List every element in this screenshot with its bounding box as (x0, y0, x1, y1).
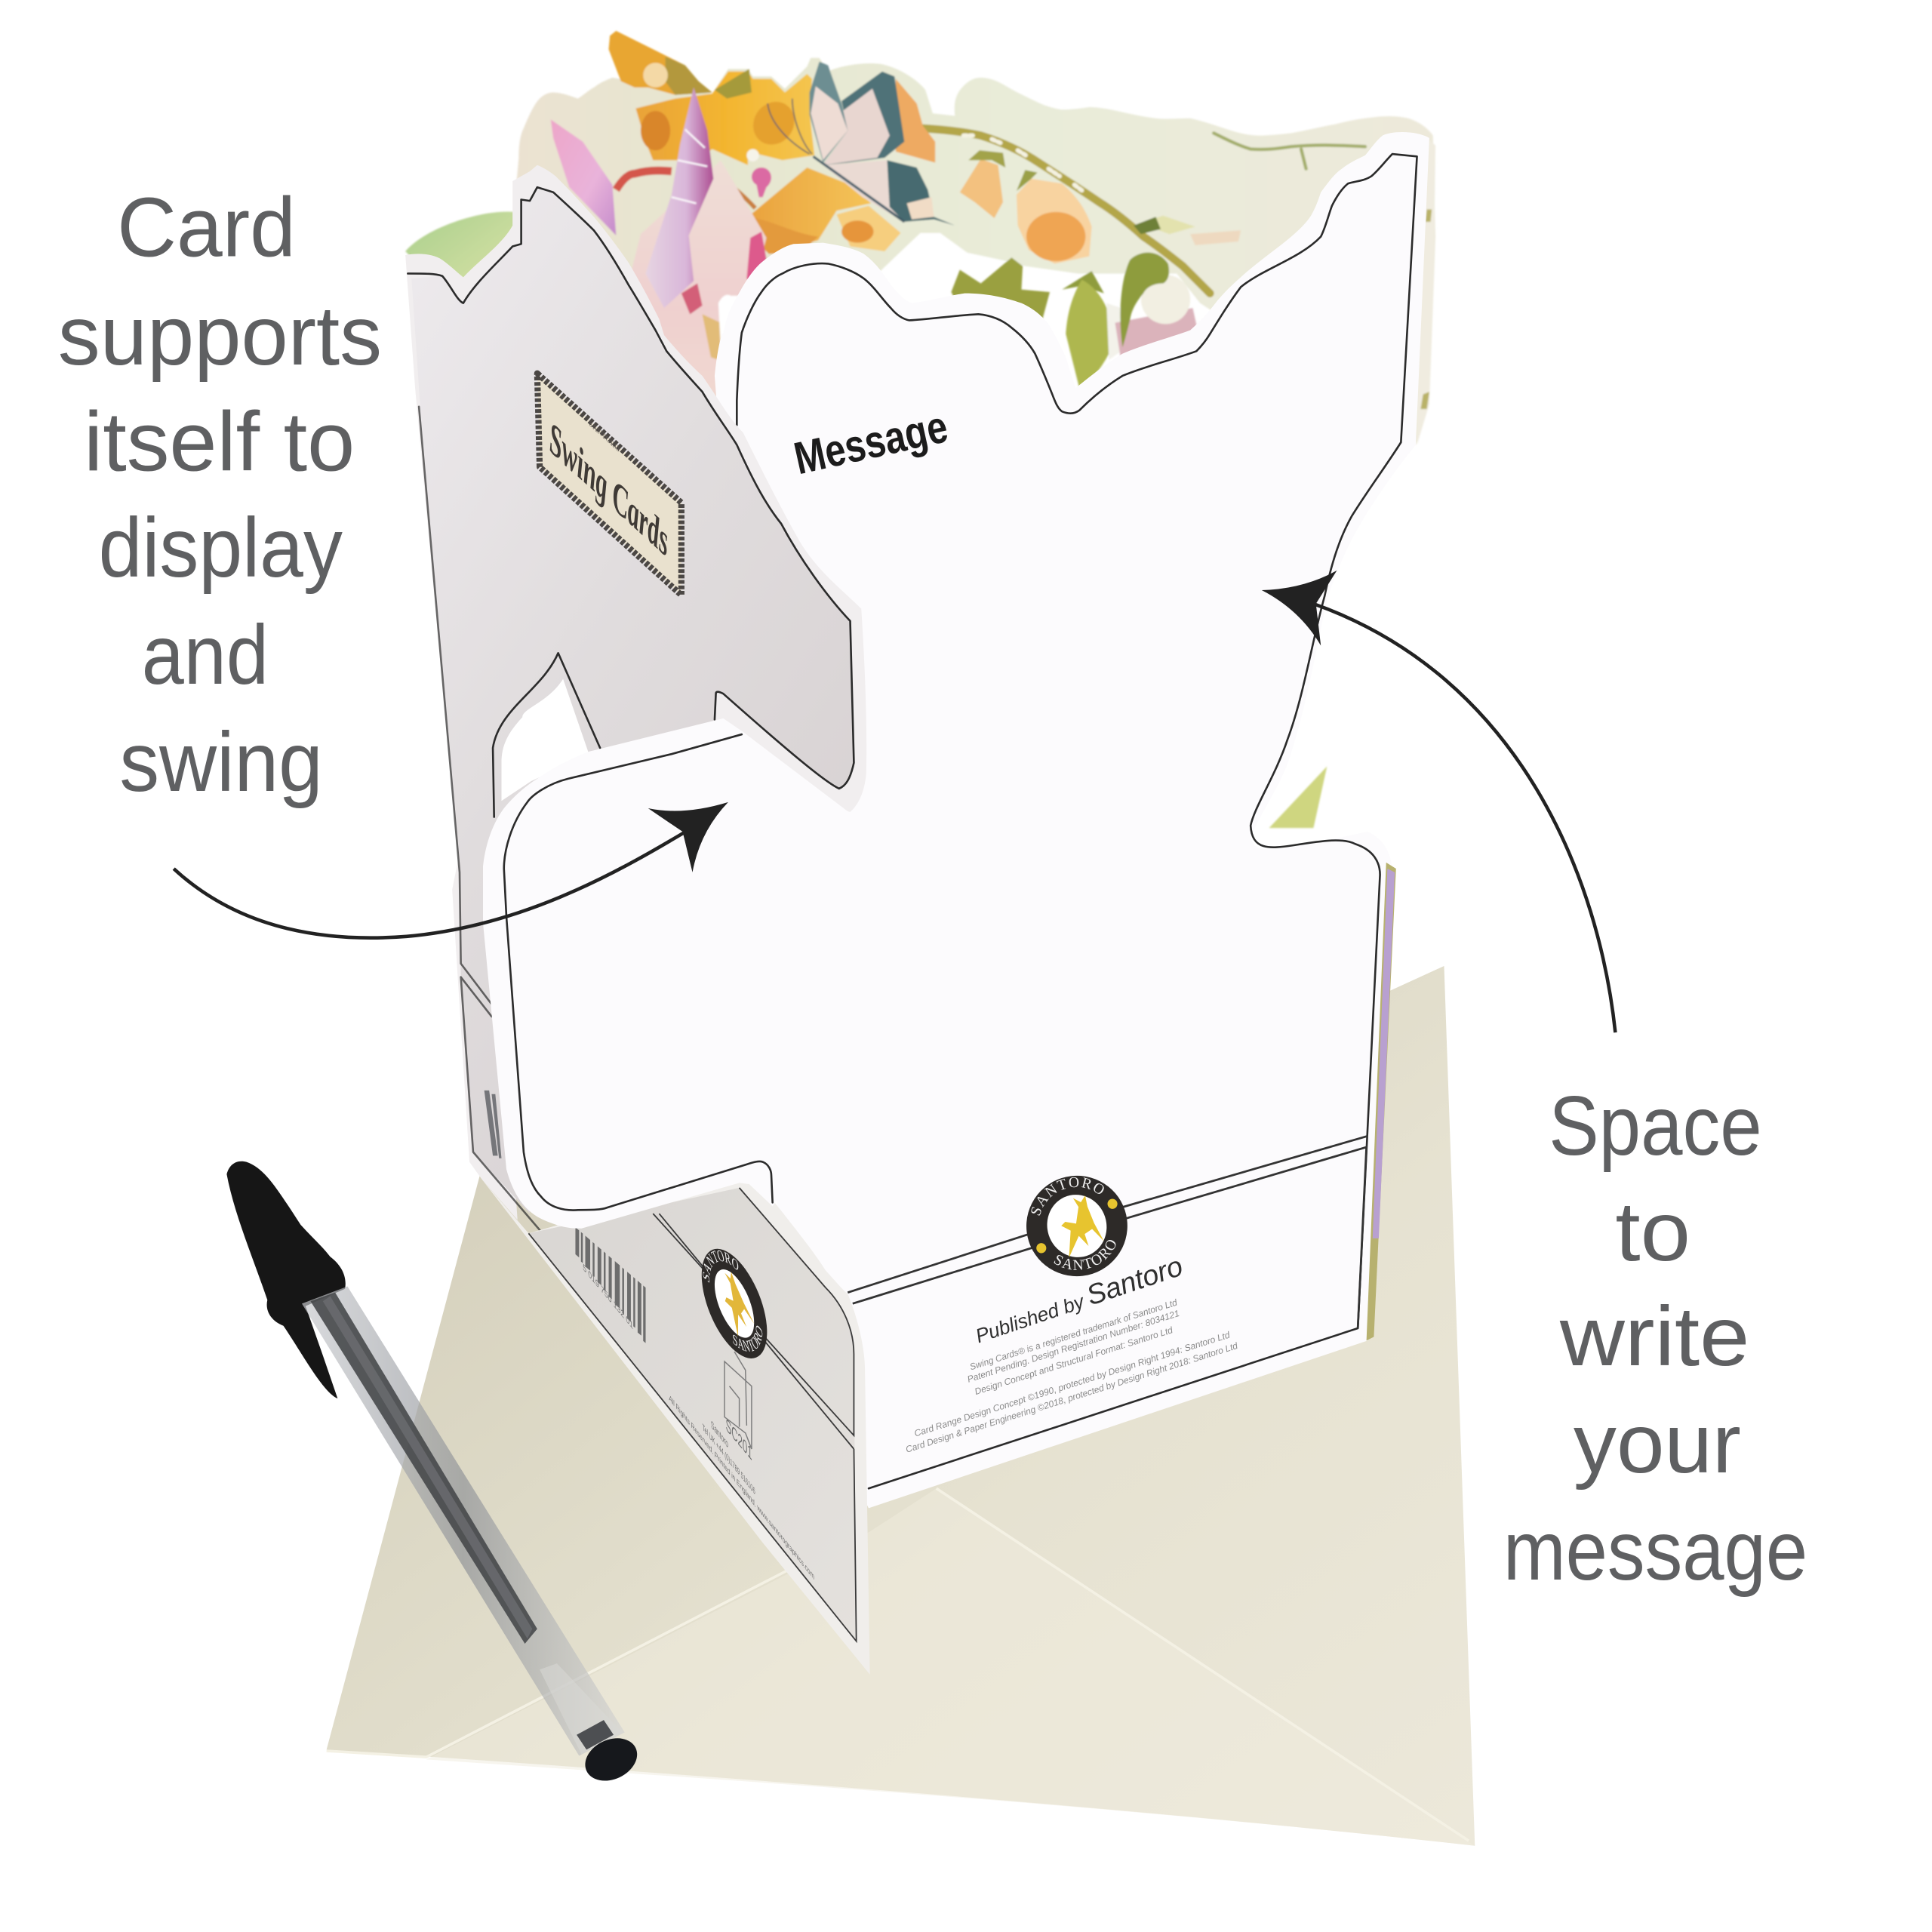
logo: Santoro: SANTORO (1054, 1240, 1115, 1270)
annotation: card supports itself: and (142, 608, 269, 702)
pen (226, 1161, 644, 1789)
text: product code and address: All Rights Reserved. Printed in England. www.santorographics.com (669, 1394, 814, 1583)
annotation: card supports itself (58, 180, 382, 809)
text: Message: Message (789, 400, 952, 484)
annotation: space to write your message: message (1503, 1503, 1807, 1598)
pen cap (226, 1161, 346, 1398)
small green piece by right wing (1269, 767, 1327, 828)
logo: Santoro on back (702, 1248, 767, 1358)
text: barcode digits: 5 019 750 132 01 (583, 1262, 633, 1331)
annotation: card supports itself: display (99, 500, 343, 595)
annotation: card supports itself: Card (117, 180, 296, 275)
message page keyline (737, 154, 1417, 1488)
logo: Santoro (1026, 1176, 1128, 1277)
logo label: Swing Cards: SANTORO (589, 418, 620, 455)
logo: Santoro: SANTORO (1031, 1177, 1104, 1216)
logo: Santoro on back: SANTORO (733, 1325, 762, 1352)
arrow: to message area (1262, 571, 1615, 1032)
keyhole opening (501, 679, 589, 801)
pen end plug (578, 1730, 644, 1789)
text: legal small print: Patent Pending. Design Registration Number: 8034121 (966, 1308, 1180, 1385)
envelope (327, 966, 1475, 1846)
butterfly (810, 62, 955, 226)
leaves below floral panel (951, 253, 1198, 388)
pen barrel (302, 1286, 625, 1756)
panel: floral artwork behind card (405, 31, 1435, 828)
panel: grey lower back tab (483, 1180, 869, 1674)
double rule lines (848, 1136, 1367, 1328)
icon: card outline (724, 1352, 752, 1449)
bell flowers (960, 150, 1195, 263)
text: product code and address: Tel UK +44 (0)1789 516106 (703, 1423, 755, 1497)
text: legal small print: Swing Cards® is a registered trademark of Santoro Ltd (968, 1297, 1180, 1372)
panel: grey left page with wing (405, 165, 866, 1270)
vine and twig (921, 128, 1365, 294)
green left corner (405, 212, 514, 296)
text: product code and address: Santoro (711, 1417, 728, 1451)
logo label: Swing Cards (537, 374, 681, 595)
left strip keylines (419, 407, 574, 1270)
text: legal small print: Design Concept and Structural Format: Santoro Ltd (974, 1324, 1175, 1397)
peach streak (1190, 230, 1241, 245)
logo label: Swing Cards: Swing Cards (549, 409, 668, 569)
pink crystal wings (551, 88, 771, 407)
text: legal small print: Card Range Design Concept ©1990, protected by Design Right 1994: Santoro Ltd (913, 1329, 1232, 1439)
annotation: card supports itself: itself to (84, 395, 355, 489)
annotation: card supports itself: supports (58, 288, 382, 383)
text: publisher line: Published by Santoro (971, 1250, 1186, 1349)
right sliver (1417, 138, 1435, 445)
tab keyline (504, 734, 773, 1211)
panel: white message page (715, 132, 1429, 1508)
annotation: space to write your message: to (1615, 1184, 1690, 1278)
text: product code and address: SC201 (726, 1414, 752, 1465)
barcode (575, 1227, 646, 1343)
annotation: space to write your message (1503, 1078, 1807, 1598)
annotation: space to write your message: write (1559, 1289, 1749, 1383)
annotation: space to write your message: your (1574, 1396, 1741, 1491)
panel: front white swing tab (483, 718, 900, 1232)
colored edge strip (1367, 863, 1396, 1340)
grey page keyline (408, 187, 854, 789)
arrow: to swing tab (174, 802, 728, 938)
annotation: card supports itself: swing (119, 715, 323, 809)
logo: Santoro on back: SANTORO (703, 1250, 738, 1283)
barcode on left strip (485, 1091, 501, 1158)
floral background panel (405, 58, 1435, 445)
text: legal small print: Card Design & Paper Engineering ©2018, protected by Design Right 2018: Santoro Ltd (904, 1340, 1240, 1455)
orange flowers (609, 31, 935, 254)
annotation: space to write your message: Space (1549, 1078, 1762, 1173)
